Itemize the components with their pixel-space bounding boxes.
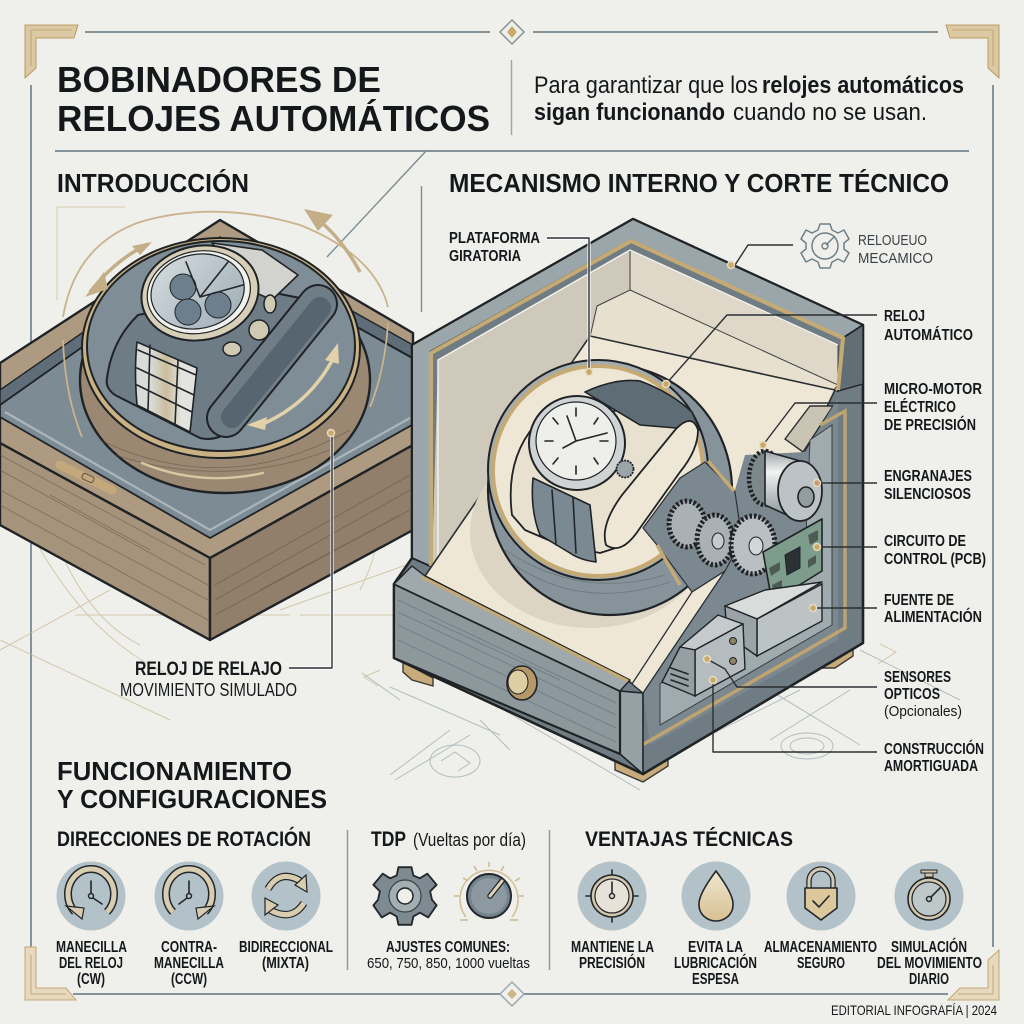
callout: sensores: SENSORES [884, 669, 951, 686]
panel: tdp: AJUSTES COMUNES: [386, 939, 510, 956]
illustration: wooden display box with watch [0, 209, 413, 640]
title [57, 59, 490, 139]
subtitle: sigan funcionando [534, 99, 725, 126]
icon: stopwatch [894, 862, 964, 930]
callout: reloj automático: AUTOMÁTICO [884, 325, 973, 344]
callout: construcción [710, 676, 984, 775]
icon: oil drop [682, 862, 750, 930]
subtitle: Para garantizar que los [534, 72, 758, 99]
panel: direcciones de rotación: MANECILLA [154, 955, 224, 972]
callout: micro-motor: MICRO-MOTOR [884, 381, 982, 398]
circuit board [763, 519, 822, 602]
watch hands [186, 262, 243, 297]
subtitle: relojes automáticos [762, 72, 964, 99]
power supply [725, 582, 822, 656]
panel: tdp [367, 828, 530, 972]
watch case [133, 235, 267, 351]
heading: mecanismo interno: MECANISMO INTERNO Y CORTE TÉCNICO [449, 168, 949, 198]
feet [403, 645, 853, 782]
callout: reloj de relajo [120, 430, 334, 700]
box felt floor [0, 250, 412, 538]
watch head [133, 235, 267, 351]
compartment gold frame [622, 411, 845, 752]
cushion roll [605, 421, 698, 548]
panel: direcciones de rotación: CONTRA- [161, 939, 217, 956]
leather strap [532, 380, 700, 562]
panel: direcciones de rotación: (CW) [77, 971, 105, 988]
callout: circuito: CIRCUITO DE [884, 533, 966, 550]
subtitle: cuando no se usan. [733, 99, 927, 126]
callout: construcción: CONSTRUCCIÓN [884, 739, 984, 758]
callout: construcción: AMORTIGUADA [884, 758, 978, 775]
rotation arrows [63, 209, 388, 437]
panel: ventajas técnicas: LUBRICACIÓN [674, 953, 757, 972]
wood grain [0, 455, 410, 620]
gear cutout [643, 462, 742, 592]
callout: circuito: CONTROL (PCB) [884, 551, 986, 568]
gears [669, 501, 775, 574]
cream floor strip [632, 571, 725, 693]
base bevel [394, 566, 630, 691]
callout: relojero mecánico: MECAMICO [858, 250, 933, 267]
callout: engranajes [814, 468, 972, 503]
right frame band [838, 325, 863, 391]
turntable band [488, 365, 732, 615]
box inner walls [0, 237, 413, 405]
watch cushion [107, 290, 310, 439]
base front [394, 584, 620, 754]
panel: ventajas técnicas [571, 828, 982, 988]
watch cushion [511, 410, 694, 553]
panel: ventajas técnicas: PRECISIÓN [579, 953, 645, 972]
callout: micro-motor [760, 381, 982, 448]
subtitle [534, 72, 964, 126]
left inner wall [428, 250, 630, 578]
panel: direcciones de rotación [56, 827, 333, 988]
callout: circuito [814, 533, 986, 568]
panel: ventajas técnicas: SEGURO [797, 955, 845, 972]
panel: direcciones de rotación: (CCW) [171, 971, 207, 988]
panel: ventajas técnicas: DEL MOVIMIENTO [877, 955, 982, 972]
callout: plataforma giratoria: GIRATORIA [449, 248, 521, 265]
callout: sensores: OPTICOS [884, 686, 940, 703]
box rim [0, 220, 413, 558]
callout: reloj automático: RELOJ [884, 308, 925, 325]
micro motor [749, 451, 822, 521]
turntable gold ring and cream face [493, 366, 703, 576]
panel: direcciones de rotación: BIDIRECCIONAL [239, 939, 333, 956]
knob [507, 666, 537, 700]
icon: counter-clockwise [154, 862, 224, 930]
callout: plataforma giratoria [449, 230, 592, 376]
icon: dial knob [454, 862, 524, 920]
crown [616, 460, 634, 478]
illustration: winder cutaway [394, 219, 863, 782]
callout: relojero mecánico [728, 224, 933, 268]
panel: tdp: 650, 750, 850, 1000 vueltas [367, 955, 530, 972]
panel: tdp: (Vueltas por día) [413, 830, 526, 850]
watch dial [144, 245, 251, 337]
inner shelf [590, 290, 838, 392]
callout: reloj automático [662, 308, 973, 388]
callout: micro-motor: ELÉCTRICO [884, 397, 956, 416]
title: BOBINADORES DE [57, 59, 381, 100]
callout: fuente: ALIMENTACIÓN [884, 607, 982, 626]
heading: funcionamiento [57, 756, 327, 814]
callout: fuente: FUENTE DE [884, 592, 954, 609]
watch dial [536, 402, 616, 480]
heading: funcionamiento: Y CONFIGURACIONES [57, 784, 327, 814]
flap [785, 406, 833, 452]
panel: ventajas técnicas: ALMACENAMIENTO [764, 939, 877, 956]
upper bracelet [212, 243, 298, 300]
panel: ventajas técnicas: EVITA LA [688, 939, 743, 956]
box left face [0, 443, 210, 640]
icon: gear dial [801, 224, 849, 268]
gold trim [431, 241, 843, 566]
disc wooden base [80, 267, 370, 493]
box latch [60, 465, 112, 490]
panel: tdp: TDP [371, 828, 406, 851]
panel: ventajas técnicas: ESPESA [692, 971, 739, 988]
callout: engranajes: ENGRANAJES [884, 468, 972, 485]
cushion roll [226, 304, 320, 418]
cream floor [425, 336, 835, 693]
callout: sensores [704, 656, 962, 720]
panel: direcciones de rotación: DEL RELOJ [59, 955, 123, 972]
callout: engranajes: SILENCIOSOS [884, 486, 971, 503]
heading: introducción: INTRODUCCIÓN [57, 168, 249, 198]
panel: direcciones de rotación: (MIXTA) [262, 955, 309, 972]
panel: direcciones de rotación: MANECILLA [56, 939, 127, 956]
callout: reloj de relajo: RELOJ DE RELAJO [135, 659, 282, 680]
title: RELOJES AUTOMÁTICOS [57, 98, 490, 139]
corner post [620, 691, 643, 774]
callout: relojero mecánico: RELOUEUO [858, 232, 927, 249]
callout: micro-motor: DE PRECISIÓN [884, 415, 976, 434]
heading: funcionamiento: FUNCIONAMIENTO [57, 756, 292, 786]
panel: ventajas técnicas: VENTAJAS TÉCNICAS [585, 828, 793, 851]
panel: direcciones de rotación: DIRECCIONES DE ROTACIÓN [57, 827, 311, 851]
turntable shadow [470, 436, 710, 628]
panel: ventajas técnicas: MANTIENE LA [571, 939, 654, 956]
icon: clockwise [56, 862, 126, 930]
crowns [223, 295, 276, 356]
panel: ventajas técnicas: SIMULACIÓN [891, 937, 967, 956]
sensor box [662, 615, 745, 696]
faint blueprint lines [0, 207, 960, 790]
lower bracelet [136, 342, 197, 432]
subdials [170, 274, 231, 325]
icon: precision [578, 862, 646, 930]
turntable rim [488, 360, 708, 580]
box right face [210, 445, 413, 640]
watch indices [545, 408, 608, 474]
icon: gear [373, 867, 437, 925]
top frame [412, 219, 863, 566]
callout: plataforma giratoria: PLATAFORMA [449, 230, 540, 247]
back inner wall [630, 250, 838, 392]
watch hands [563, 416, 607, 448]
panel: ventajas técnicas: DIARIO [909, 971, 949, 988]
callout: fuente [810, 592, 982, 626]
disc felt [87, 241, 355, 451]
body shell [394, 219, 863, 774]
callout: sensores: (Opcionales) [884, 703, 962, 720]
icon: bidirectional [252, 862, 320, 930]
icon: padlock [786, 862, 856, 930]
callout: reloj de relajo: MOVIMIENTO SIMULADO [120, 680, 297, 700]
compartment plate [660, 425, 832, 725]
watch case [529, 396, 625, 490]
gold ring [82, 238, 360, 458]
compartment [643, 398, 838, 745]
